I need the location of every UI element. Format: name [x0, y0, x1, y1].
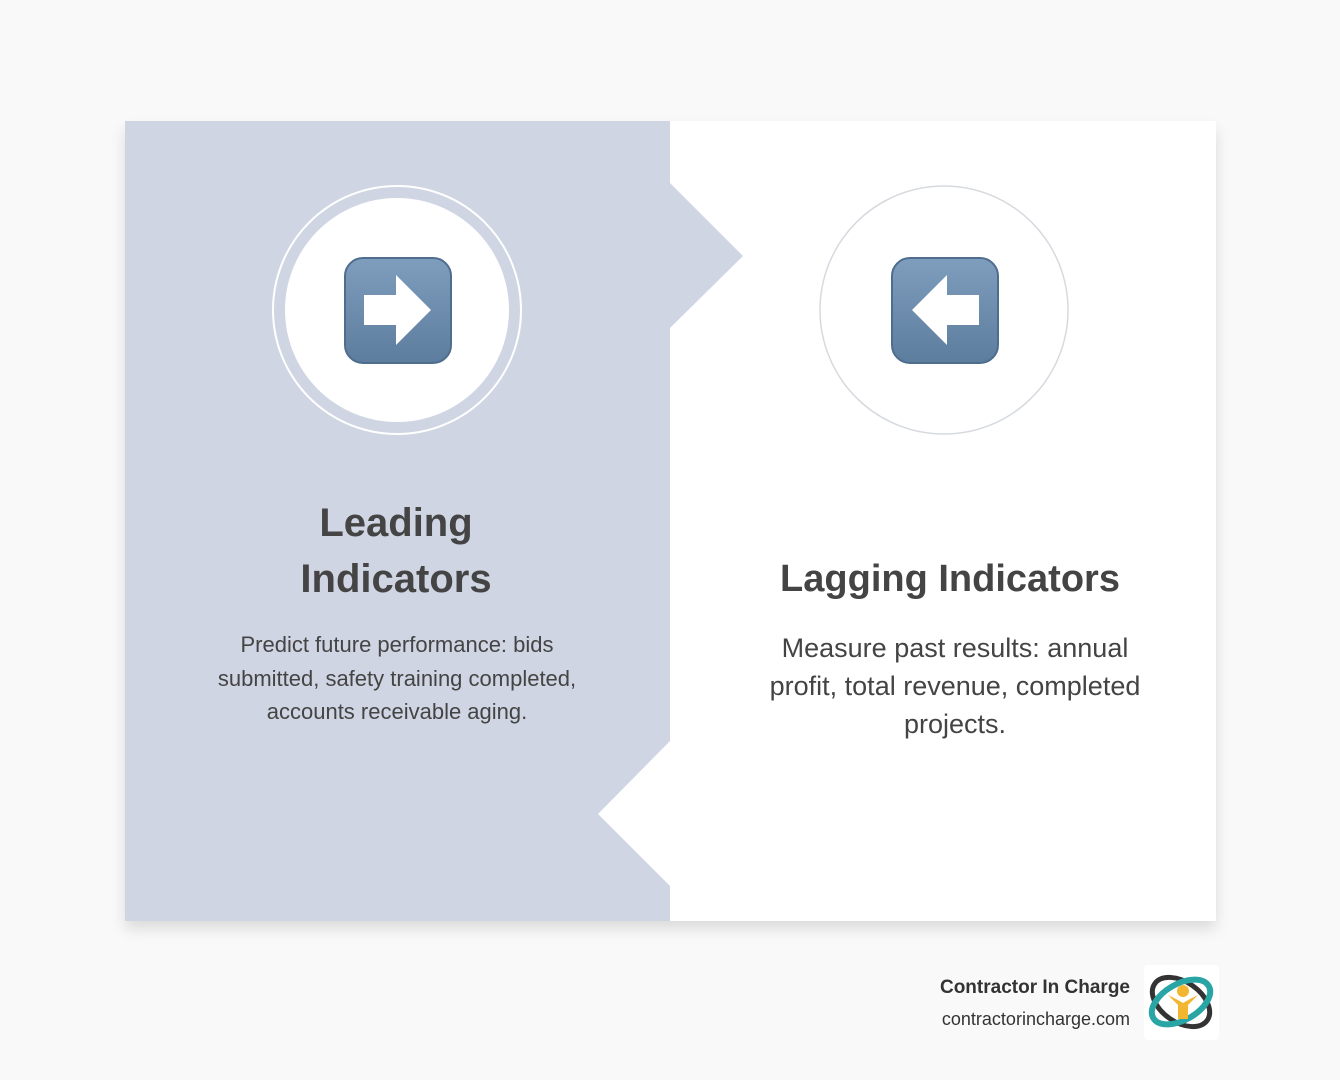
heading: leading indicators: [300, 501, 492, 601]
icon: left arrow circle: [819, 185, 1069, 435]
footer brand text: [940, 977, 1130, 1029]
panel: leading background shape: [125, 121, 743, 921]
footer brand text: Contractor In Charge: [940, 977, 1130, 998]
heading: lagging indicators: Lagging Indicators: [780, 558, 1120, 600]
text: leading description: Predict future performance: bids submitted, safety training completed, accounts receivable aging.: [218, 632, 576, 724]
logo: [1144, 965, 1219, 1040]
card: [125, 121, 1216, 921]
text: lagging description: Measure past results: annual profit, total revenue, completed projects.: [770, 633, 1140, 739]
heading: leading indicators: Leading: [319, 501, 473, 545]
heading: leading indicators: Indicators: [300, 557, 492, 601]
icon: right arrow circle: [272, 185, 522, 435]
footer brand text: contractorincharge.com: [942, 1009, 1130, 1029]
